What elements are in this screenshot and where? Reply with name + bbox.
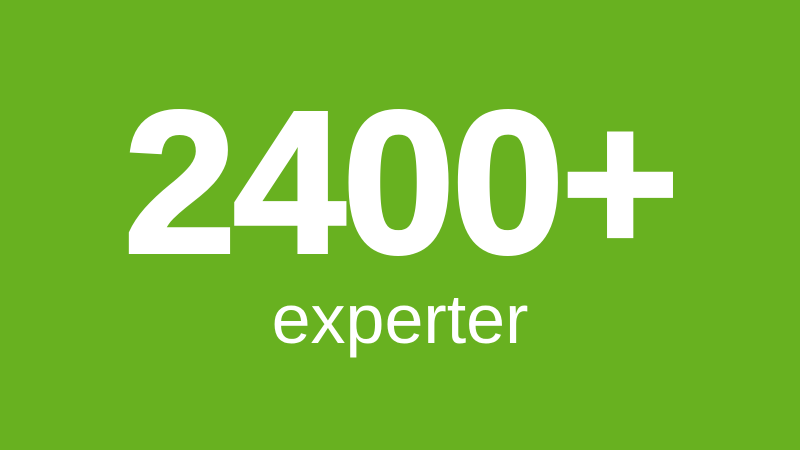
label: experter	[272, 280, 528, 358]
big number: 2400+	[124, 69, 676, 295]
